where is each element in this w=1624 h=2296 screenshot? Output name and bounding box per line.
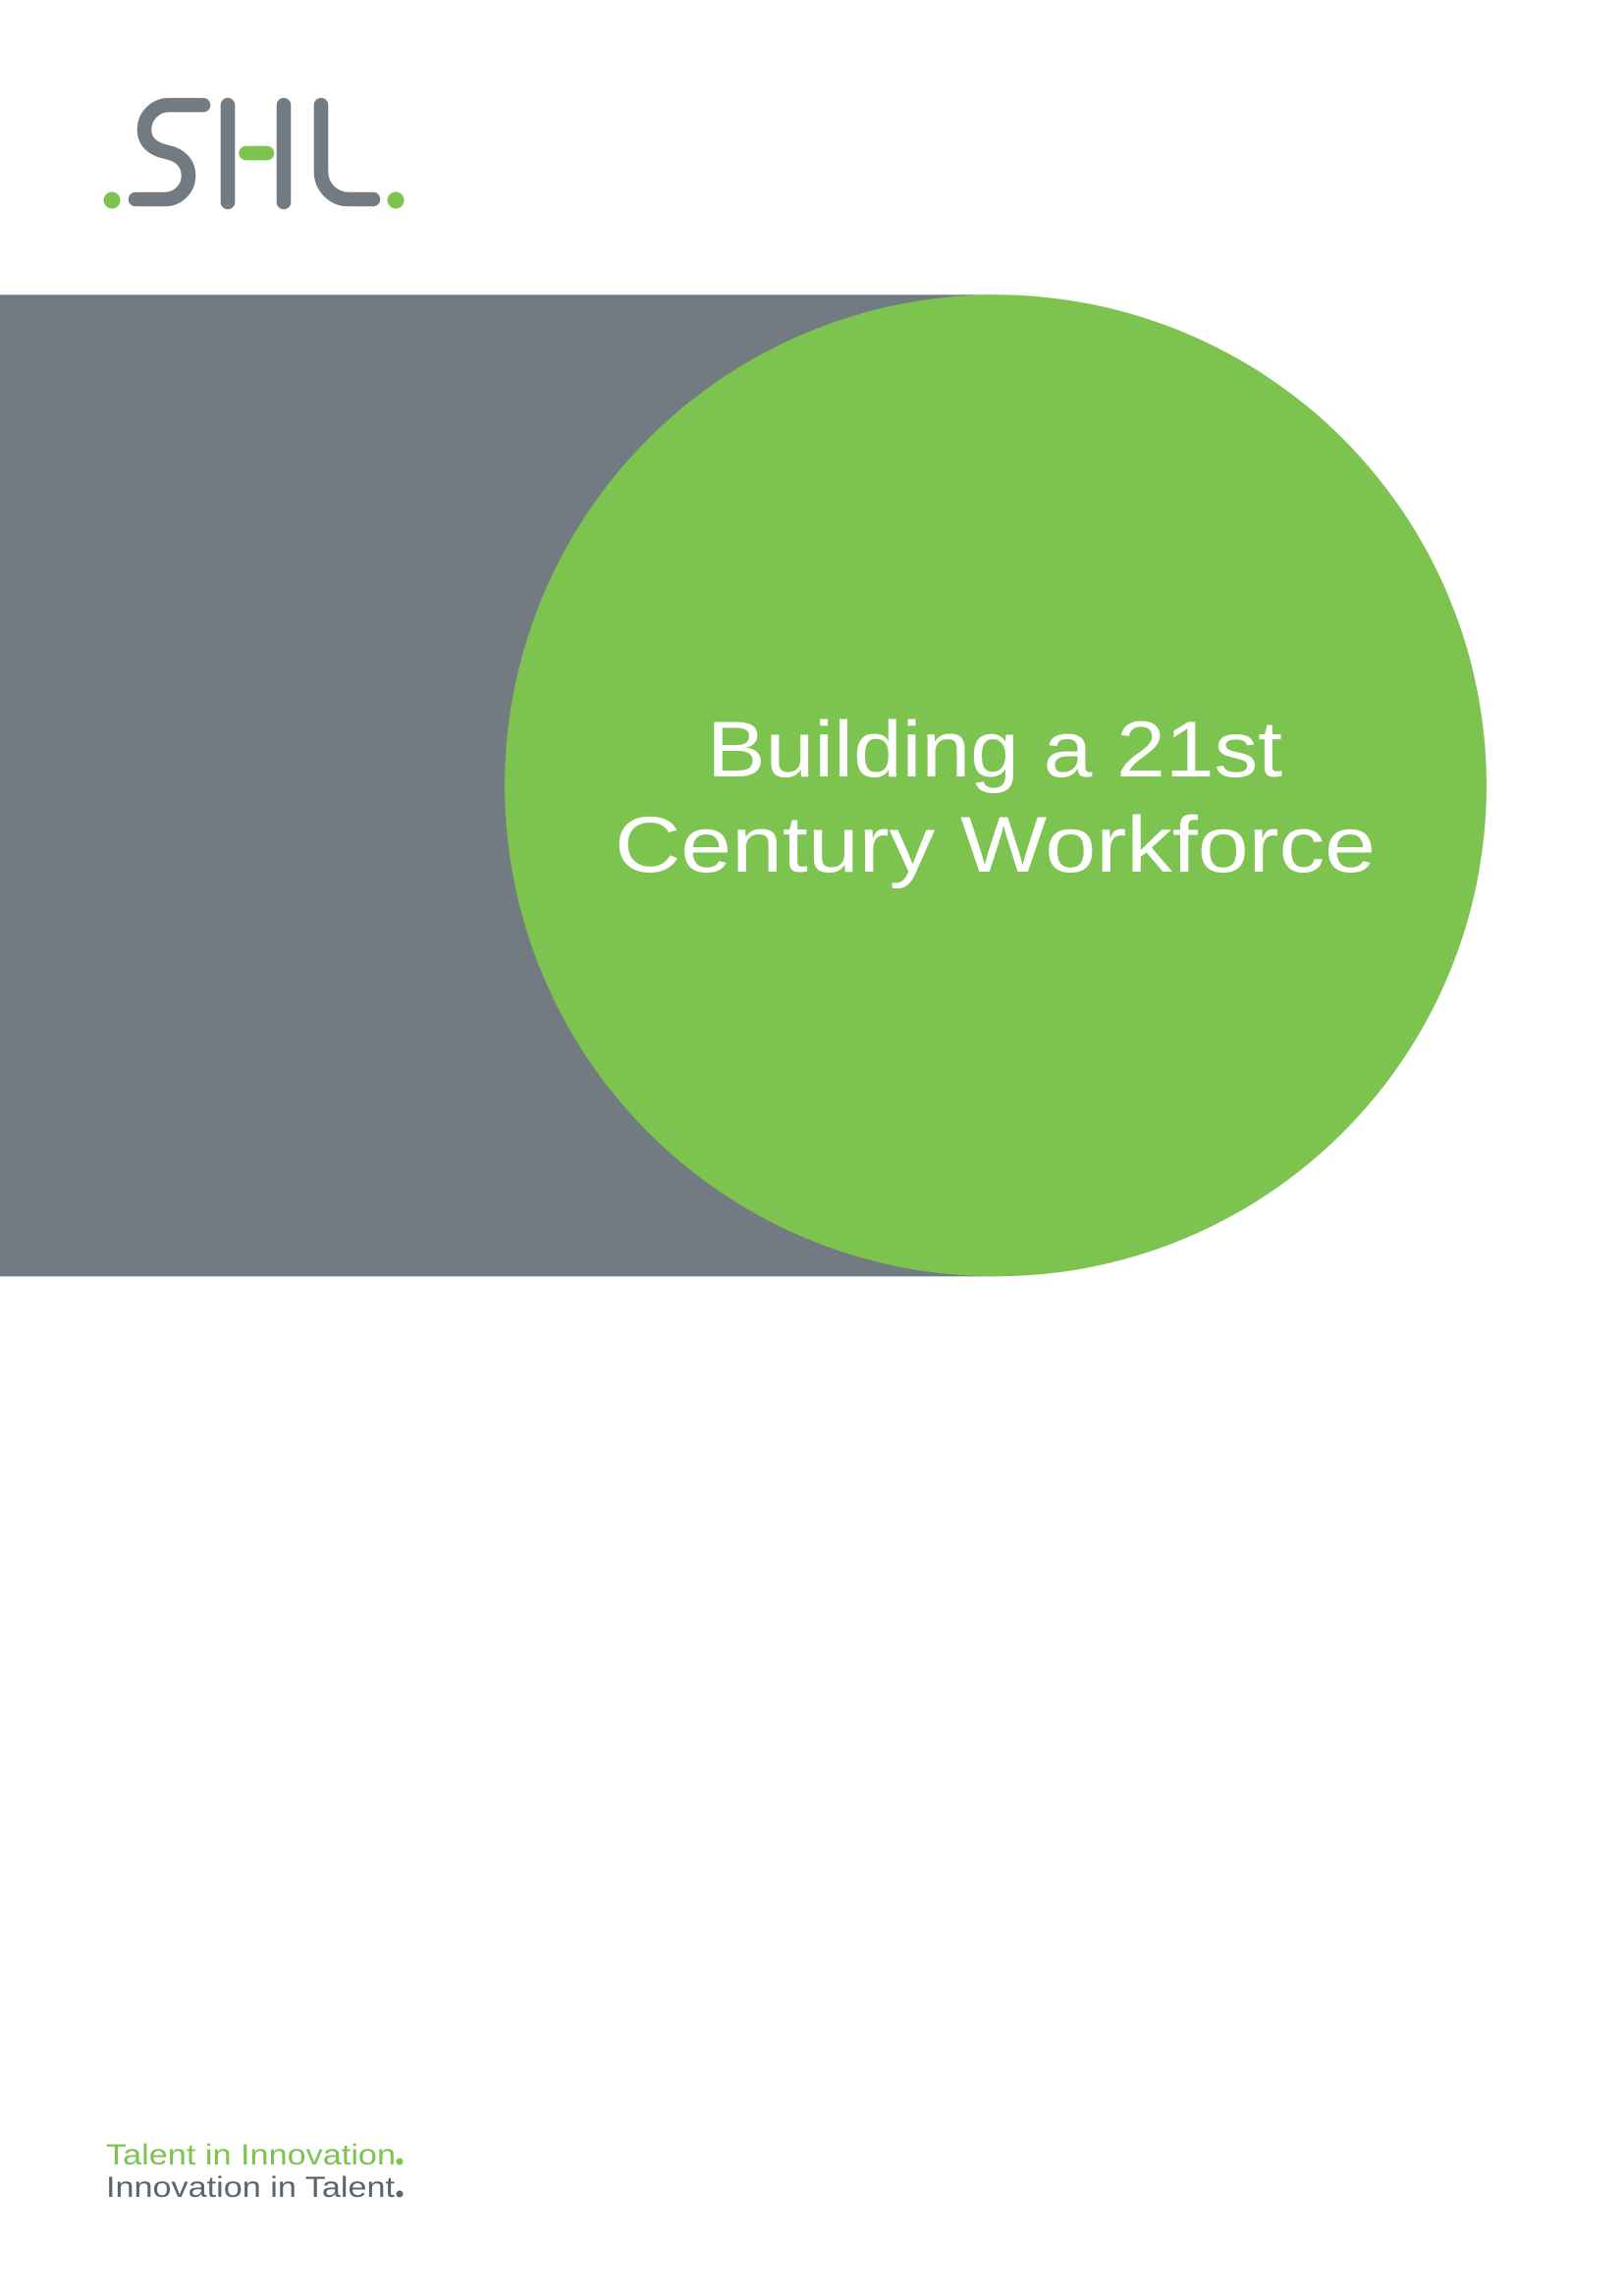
title	[615, 706, 1376, 889]
title: Building a 21st	[707, 706, 1282, 794]
logo: SHL	[104, 105, 405, 208]
tagline	[106, 2139, 403, 2204]
tagline line 2: Innovation in Talent	[106, 2171, 396, 2204]
title: Century Workforce	[615, 801, 1376, 889]
tagline line 1: Talent in Innovation	[106, 2139, 396, 2171]
logo dots	[104, 192, 405, 208]
grey banner	[0, 294, 996, 1276]
logo letter L	[321, 105, 373, 199]
logo letter H	[228, 105, 284, 202]
green circle	[505, 294, 1487, 1276]
logo letter S	[135, 105, 203, 199]
